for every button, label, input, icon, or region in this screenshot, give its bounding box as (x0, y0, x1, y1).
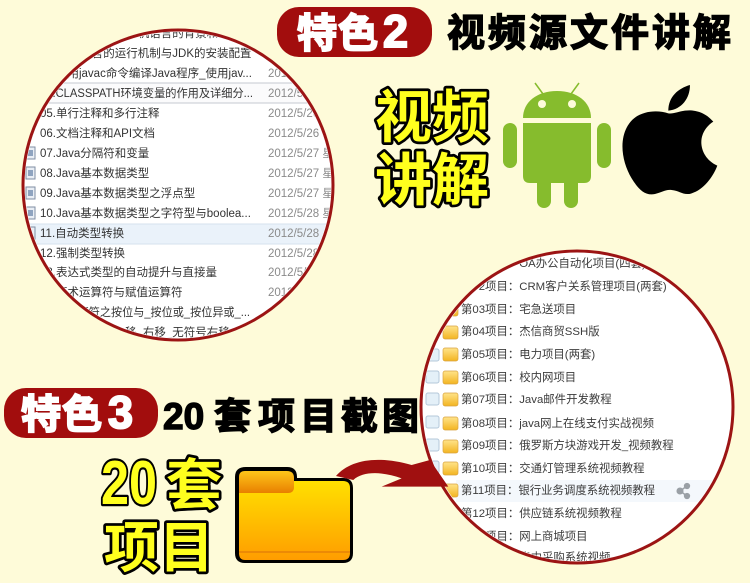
icon: android (503, 83, 611, 208)
panel: circular file list screenshot: 04.CLASSPATH环境变量的作用及详细分... (40, 86, 253, 100)
panel: circular file list screenshot: 2012/5/27 星 (268, 167, 334, 180)
heading: 20 套项目截图: 项 (258, 396, 295, 437)
panel: circular project list screenshot: 第06项目：校内网项目 (461, 370, 576, 384)
panel: circular file list screenshot: 13.表达式类型的自动提升与直接量 (40, 265, 217, 279)
heading: 视频源文件讲解: 视频源文件讲解 (447, 13, 734, 55)
badge: 特色3: 3 (108, 387, 133, 438)
badge: 特色3 (4, 387, 158, 438)
panel: circular file list screenshot: 2012/5/28 (268, 228, 319, 240)
panel: circular file list screenshot: 14.算术运算符与赋值运算符 (40, 285, 182, 299)
label: 20套项目: 套 (166, 454, 222, 517)
panel: circular project list screenshot (421, 251, 733, 564)
panel: circular project list screenshot: 第11项目：银行业务调度系统视频教程 (461, 483, 655, 497)
panel: circular file list screenshot: 2012/5/28 (268, 248, 319, 260)
panel: circular project list screenshot: 第10项目：交通灯管理系统视频教程 (461, 461, 645, 475)
label: 视频讲解: 视频 (375, 86, 489, 150)
panel: circular file list screenshot: 03.使用javac命令编译Java程序_使用jav... (40, 66, 252, 80)
panel: circular project list screenshot: 第12项目：供应链系统视频教程 (461, 506, 622, 520)
heading: 20 套项目截图: 目 (300, 396, 337, 437)
icon: share (677, 484, 689, 498)
badge: 特色2 (277, 6, 432, 57)
badge: 特色3: 色 (62, 393, 102, 437)
panel: circular file list screenshot: 2012/5/28 星 (268, 207, 334, 220)
panel: circular file list screenshot: 02.Java语言的运行机制与JDK的安装配置 (40, 46, 252, 60)
label: 视频讲解: 讲解 (375, 149, 489, 213)
panel: circular file list screenshot: 2012/5/28 (268, 287, 319, 299)
panel: circular file list screenshot: 2012/5/26 (268, 88, 319, 100)
panel: circular project list screenshot: 第02项目：CRM客户关系管理项目(两套) (461, 279, 667, 293)
heading: 20 套项目截图: 截 (341, 396, 378, 437)
panel: circular file list screenshot: 08.Java基本数据类型 (40, 166, 149, 180)
panel: circular project list screenshot: 第05项目：电力项目(两套) (461, 347, 595, 361)
panel: circular file list screenshot: 2012/5/26 (268, 128, 319, 140)
panel: circular file list screenshot (20, 26, 340, 340)
label: 20套项目: 项目 (104, 517, 214, 579)
panel: circular file list screenshot: 06.文档注释和API文档 (40, 126, 155, 140)
heading: 20 套项目截图: 套 (214, 396, 251, 437)
badge: 特色2: 特 (297, 12, 337, 56)
panel: circular file list screenshot: 2012/5/28 (268, 267, 319, 279)
panel: circular project list screenshot: 第14项目：集中采购系统视频 (461, 550, 611, 564)
panel: circular file list screenshot: 2012/5/26 (268, 68, 319, 80)
panel: circular file list screenshot: 2012/5/26 (268, 108, 319, 120)
badge: 特色2: 2 (383, 6, 408, 57)
panel: circular project list screenshot: 第08项目：java网上在线支付实战视频 (461, 416, 655, 430)
label: 20套项目: 20 (101, 449, 157, 518)
panel: circular project list screenshot: 第04项目：杰信商贸SSH版 (461, 324, 600, 338)
label: 20套项目 (101, 449, 222, 579)
panel: circular file list screenshot: 16.位运算符之左移_右移_无符号右移 (40, 325, 230, 339)
heading: 20 套项目截图: 图 (382, 396, 419, 437)
panel: circular project list screenshot: 第13项目：网上商城项目 (461, 529, 588, 543)
panel: circular project list screenshot: 第03项目：宅急送项目 (461, 302, 576, 316)
icon: folder (235, 467, 353, 563)
badge: 特色3: 特 (21, 393, 61, 437)
panel: circular file list screenshot: 05.单行注释和多行注释 (40, 106, 160, 120)
panel: circular file list screenshot: 09.Java基本数据类型之浮点型 (40, 186, 195, 200)
arrow: folder to project list (336, 460, 448, 487)
panel: circular file list screenshot: 11.自动类型转换 (40, 226, 125, 240)
panel: circular project list screenshot: 第09项目：俄罗斯方块游戏开发_视频教程 (461, 438, 674, 452)
heading: 20 套项目截图: 20 (163, 396, 204, 437)
icon: apple (622, 85, 717, 194)
panel: circular file list screenshot: 10.Java基本数据类型之字符型与boolea... (40, 206, 251, 220)
panel: circular file list screenshot: 15.位运算符之按位与_按位或_按位异或_... (40, 305, 250, 319)
panel: circular file list screenshot: 07.Java分隔符和变量 (40, 146, 149, 160)
panel: circular project list screenshot: 第07项目：Java邮件开发教程 (461, 392, 612, 406)
panel: circular file list screenshot: 2012/5/27 星 (268, 147, 334, 160)
badge: 特色2: 色 (338, 12, 378, 56)
panel: circular file list screenshot: 2012/5/27 星 (268, 187, 334, 200)
panel: circular file list screenshot: 12.强制类型转换 (40, 246, 125, 260)
label: 视频讲解 (375, 86, 489, 213)
panel: circular project list screenshot: 第01项目：OA办公自动化项目(四套) (461, 256, 646, 270)
panel: circular file list screenshot: 01.Java之前的计算机语言的背景和 (40, 26, 218, 40)
